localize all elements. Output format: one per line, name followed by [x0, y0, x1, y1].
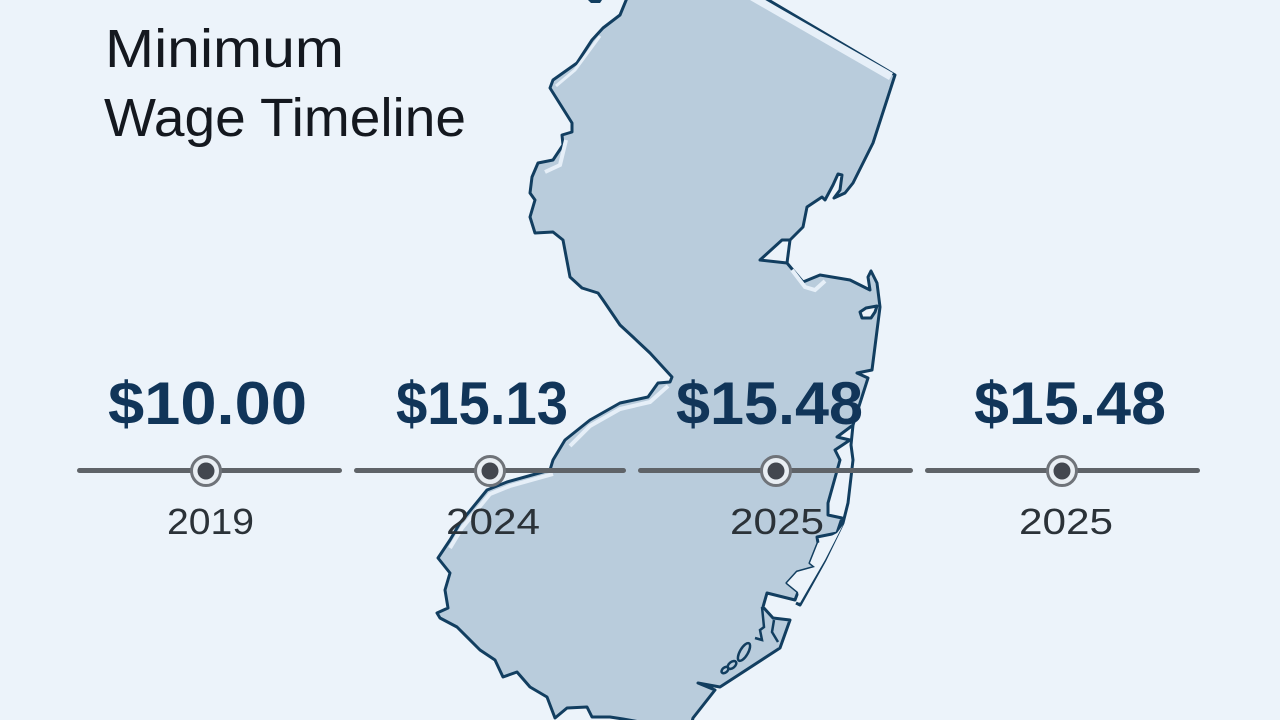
timeline item 2019 [77, 370, 342, 542]
title: Wage Timeline [104, 88, 466, 148]
timeline item 2024: 2024 [446, 501, 540, 542]
timeline item 2025 second: 2025 [1019, 501, 1113, 542]
timeline item 2025 second [925, 370, 1200, 542]
timeline item 2025: 2025 [730, 501, 824, 542]
timeline item 2025 [638, 370, 913, 542]
coastal pond [860, 306, 877, 318]
timeline item 2019: 2019 [167, 501, 254, 542]
barrier lagoon fill [787, 525, 843, 603]
bay island [787, 240, 790, 263]
timeline item 2025 second: $15.48 [974, 370, 1166, 437]
map: New Jersey [437, 0, 895, 720]
barrier island [796, 425, 853, 605]
timeline item 2024: $15.13 [396, 370, 568, 437]
timeline item 2019: $10.00 [108, 370, 307, 437]
southern lagoon marks [720, 607, 778, 674]
title: Minimum [105, 19, 344, 79]
top map fragment [588, 0, 602, 3]
timeline item 2025: $15.48 [676, 370, 863, 437]
map highlight edges [450, 0, 893, 548]
timeline item 2024 [354, 370, 626, 542]
